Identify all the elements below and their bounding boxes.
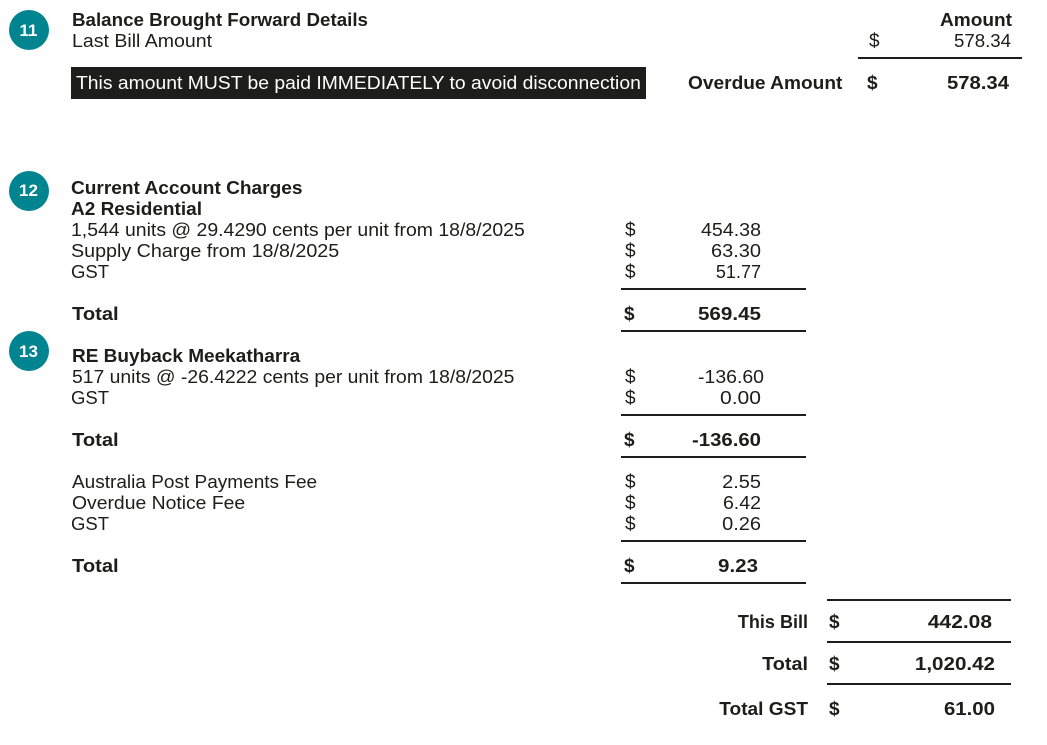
total GST value: 61.00 [944,699,995,719]
supply dollar: $ [625,241,636,262]
badge 11 [9,10,49,50]
badge 11: 11 [20,21,37,40]
last bill value: 578.34 [954,31,1011,51]
heading: current account charges: Current Account Charges [71,178,302,198]
last bill row: Last Bill Amount [72,31,212,51]
last bill dollar: $ [869,31,880,52]
heading: balance brought forward: Balance Brought Forward Details [72,10,368,30]
overdue fee dollar: $ [625,493,636,514]
buyback GST value: 0.00 [720,388,761,408]
fee GST value: 0.26 [722,514,761,534]
grand total label: Total [762,654,808,674]
grand total value: 1,020.42 [915,654,995,674]
GST label: GST [71,262,109,282]
disconnection notice [71,67,646,99]
fee total dollar: $ [624,556,635,577]
total GST label: Total GST [719,699,808,719]
buyback total dollar: $ [624,430,635,451]
buyback total label: Total [72,430,119,450]
fee GST dollar: $ [625,514,636,535]
fee GST label: GST [71,514,109,534]
badge 12: 12 [19,181,38,200]
grand total dollar: $ [829,654,840,675]
total value: 569.45 [698,304,761,324]
total GST dollar: $ [829,699,840,720]
GST dollar: $ [625,262,636,283]
post fee dollar: $ [625,472,636,493]
heading: RE buyback: RE Buyback Meekatharra [72,346,300,366]
total dollar: $ [624,304,635,325]
overdue amount label: Overdue Amount [688,73,842,93]
this bill dollar: $ [829,612,840,633]
badge 12 [9,171,49,211]
badge 13 [9,331,49,371]
units value: 454.38 [701,220,761,240]
units dollar: $ [625,220,636,241]
this bill value: 442.08 [928,612,992,632]
buyback GST label: GST [71,388,109,408]
overdue value: 578.34 [947,73,1009,93]
heading: amount: Amount [940,10,1012,30]
buyback row label: 517 units @ -26.4222 cents per unit from 18/8/2025 [72,367,514,387]
badge 13: 13 [19,342,38,361]
total label: Total [72,304,119,324]
supply label: Supply Charge from 18/8/2025 [71,241,339,261]
post fee value: 2.55 [722,472,761,492]
post fee label: Australia Post Payments Fee [72,472,317,492]
fee total value: 9.23 [718,556,758,576]
GST value: 51.77 [716,262,761,282]
disconnection notice: This amount MUST be paid IMMEDIATELY to avoid disconnection [76,73,641,93]
buyback value: -136.60 [698,367,764,387]
buyback dollar: $ [625,367,636,388]
buyback GST dollar: $ [625,388,636,409]
supply value: 63.30 [711,241,761,261]
overdue fee label: Overdue Notice Fee [72,493,245,513]
overdue dollar: $ [867,73,878,94]
units row label: 1,544 units @ 29.4290 cents per unit from 18/8/2025 [71,220,525,240]
this bill label: This Bill [738,612,808,632]
overdue fee value: 6.42 [723,493,761,513]
buyback total value: -136.60 [692,430,761,450]
subheading: A2 residential: A2 Residential [71,199,202,219]
fee total label: Total [72,556,119,576]
